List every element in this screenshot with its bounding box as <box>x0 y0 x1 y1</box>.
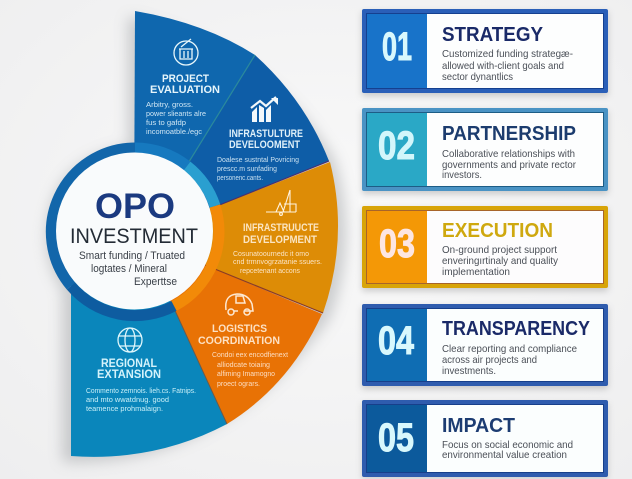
text: transparency description: across air projects and <box>442 354 537 366</box>
heading: logistics coordination: LOGISTICS <box>212 323 267 335</box>
heading: investment: INVESTMENT <box>70 225 198 248</box>
text: amber segment description: repcetenant accons <box>240 268 300 275</box>
text: logistics description: Condoi eex encodfienext <box>212 352 288 359</box>
text: execution description: enveringırtinaly and quality <box>442 255 559 267</box>
text: partnership description: investors. <box>442 169 482 181</box>
text: project evaluation description: incomoatble./egc <box>146 129 203 136</box>
heading: regional extansion: REGIONAL <box>101 358 157 370</box>
heading: infrastruucte development: DEVELOPMENT <box>243 234 317 246</box>
heading: regional extansion: EXTANSION <box>97 369 161 381</box>
text: transparency description: Clear reporting and compliance <box>442 343 577 355</box>
text: execution description: implementation <box>442 266 510 278</box>
ring segments <box>51 148 219 316</box>
text: partnership description: governments and private rector <box>442 159 576 171</box>
text: infrastulture description: Doalese sustntal Povricing <box>217 157 299 164</box>
heading: logistics coordination: COORDINATION <box>198 335 280 347</box>
text: partnership description: Collaborative relationships with <box>442 148 575 160</box>
heading: project evaluation: PROJECT <box>162 73 209 85</box>
number 02: 02 <box>378 124 415 168</box>
text: logistics description: alfiming Imamogno <box>217 371 275 378</box>
panel: center hub <box>51 148 219 316</box>
text: strategy description: sector dynantlics <box>442 71 513 83</box>
panel: regional extansion segment <box>71 232 227 457</box>
text: amber segment description: cnd trmnvogrzatanie ssuers. <box>233 259 322 266</box>
panel: project evaluation segment <box>134 11 255 232</box>
text: strategy description: Customized funding strategæ- <box>442 48 573 60</box>
card: 01 strategy <box>362 9 608 96</box>
text: impact description: Focus on social economic and <box>442 439 573 451</box>
text: hub tagline: Experttse <box>134 276 177 288</box>
panel: wheel diagram <box>46 11 346 462</box>
icon: project building <box>174 39 198 65</box>
number 04: 04 <box>378 319 415 363</box>
heading: execution: EXECUTION <box>442 220 553 242</box>
heading: project evaluation: EVALUATION <box>150 84 220 96</box>
heading: impact: IMPACT <box>442 415 515 437</box>
text: regional description: and mto wwatdnug. good <box>86 397 169 404</box>
card: 02 partnership <box>362 108 608 194</box>
text: logistics description: proect ogrars. <box>217 381 260 388</box>
panel: logistics coordination segment <box>134 232 322 424</box>
number 03: 03 <box>379 222 415 266</box>
panel: infrastructure development segment (amber) <box>134 162 338 313</box>
text: impact description: environmental value creation <box>442 449 567 461</box>
icon: globe <box>118 328 142 352</box>
text: project evaluation description: fus to gafdp <box>146 120 186 127</box>
text: amber segment description: Cosunatoournedc it omo <box>233 251 309 258</box>
text: transparency description: investments. <box>442 365 496 377</box>
heading: partnership: PARTNERSHIP <box>442 123 576 145</box>
panel: infrastructure development segment (blue) <box>134 55 329 232</box>
text: hub tagline: logtates / Mineral <box>91 263 167 275</box>
text: infrastulture description: personenc.cants. <box>217 175 263 182</box>
text: hub tagline: Smart funding / Truated <box>79 250 185 262</box>
text: regional description: Commento zemnois. lieh.cs. Fatnips. <box>86 388 196 395</box>
heading: infrastulture development: INFRASTULTURE <box>229 128 303 140</box>
number 05: 05 <box>378 416 414 460</box>
heading: strategy: STRATEGY <box>442 24 544 46</box>
heading: infrastruucte development: INFRASTRUUCTE <box>243 222 319 234</box>
icon: construction crane <box>266 190 296 215</box>
card: 04 transparency <box>362 304 608 389</box>
heading: infrastulture development: DEVELOOMENT <box>229 139 300 151</box>
card: 03 execution <box>362 206 608 291</box>
icon: delivery truck <box>226 294 253 315</box>
text: logistics description: alliodcate toiaing <box>217 362 270 369</box>
icon: rising bar chart <box>251 97 278 122</box>
text: regional description: teamence prohmalaign. <box>86 406 163 413</box>
text: infrastulture description: prescc.m sunfading <box>217 166 277 173</box>
number 01: 01 <box>382 25 412 69</box>
text: execution description: On-ground project support <box>442 244 557 256</box>
card: 05 impact <box>362 400 608 479</box>
heading: transparency: TRANSPARENCY <box>442 318 591 340</box>
text: strategy description: allowed with-client goals and <box>442 60 564 72</box>
text: project evaluation description: power slieants alre <box>146 111 206 118</box>
text: project evaluation description: Arbitry, gross. <box>146 102 193 109</box>
heading: OPO: OPO <box>95 187 175 226</box>
